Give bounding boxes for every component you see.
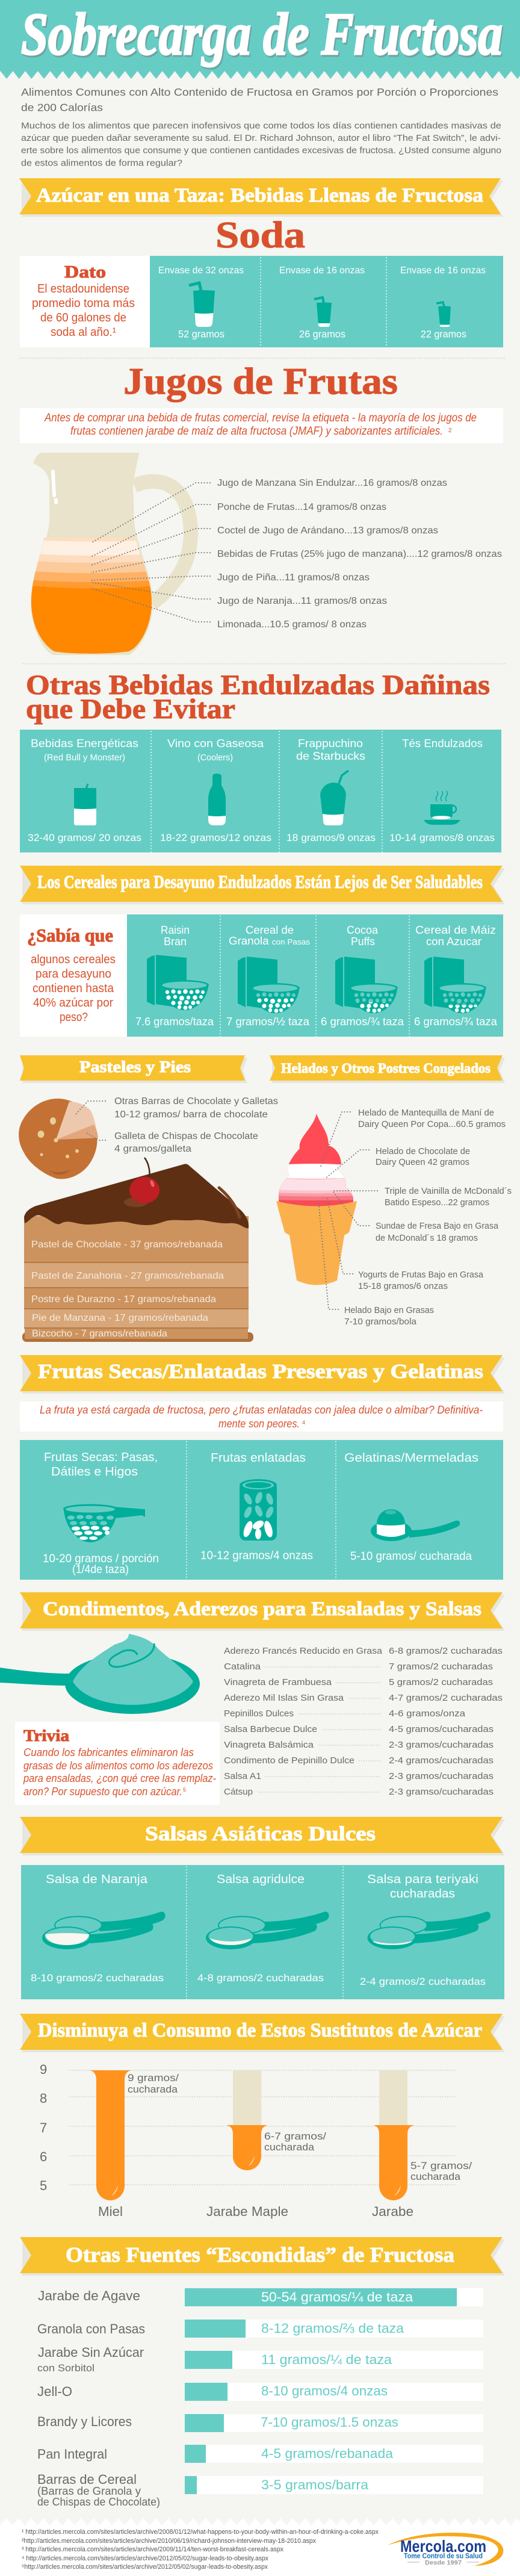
canned fruit: [200, 1451, 313, 1562]
did you know: [27, 925, 116, 1024]
bar chart: hidden sources: [37, 2288, 483, 2508]
chart: cake layers: Pastel de Chocolate - 37 gramos/rebanada: [31, 1240, 223, 1250]
intro heading: [21, 86, 498, 113]
ice cream labels: Helado Bajo en Grasas: [344, 1306, 434, 1315]
sweet and sour: Salsa agridulce: [217, 1873, 305, 1886]
soda 16 oz small: [400, 265, 486, 340]
jell-o: 8-10 gramos/4 onzas: [261, 2383, 388, 2398]
intro paragraph: erte sobre los alimentos que consume y que contienen cantidades excesivas de fructosa. ¿Usted consume alguno: [21, 146, 501, 155]
logo: mercola: [388, 2533, 503, 2566]
banner: otras fuentes: [20, 2237, 505, 2276]
corn cereal: 6 gramos/¾ taza: [414, 1016, 498, 1028]
granola: Granola con Pasas: [229, 935, 311, 947]
logo: mercola: Tome Control de su Salud: [404, 2553, 483, 2560]
raisin bran: [135, 924, 214, 1028]
heading: soda: Soda: [215, 215, 305, 256]
panel: cereals: [20, 914, 503, 1037]
icon: big spoon with dressing: [0, 1634, 200, 1714]
ice cream labels: Yogurts de Frutas Bajo en Grasa: [358, 1270, 484, 1280]
header band: [0, 0, 520, 79]
intro paragraph: de estos alimentos de forma regular?: [21, 158, 182, 169]
ice cream labels: Batido Espeso...22 gramos: [385, 1198, 489, 1208]
callout: trivia: [15, 1722, 220, 1805]
axis labels: 7: [40, 2120, 47, 2135]
soda 16 oz: 26 gramos: [299, 329, 345, 340]
icon: juice pitcher: [24, 453, 191, 659]
soda 32 oz: 52 gramos: [178, 329, 224, 340]
banner: frutas secas: [20, 1355, 505, 1394]
corn cereal: Cereal de Máiz: [415, 924, 496, 936]
chart: cake layers: Postre de Durazno - 17 gramos/rebanada: [31, 1294, 216, 1305]
banner: cereales: [20, 866, 505, 904]
did you know: peso?: [60, 1011, 88, 1024]
did you know: 40% azúcar por: [33, 996, 113, 1010]
did you know: contienen hasta: [32, 982, 114, 995]
juice list: Bebidas de Frutas (25% jugo de manzana)....12 gramos/8 onzas: [217, 549, 502, 559]
energy drinks: Bebidas Energéticas: [31, 737, 138, 750]
banner: helados: [270, 1055, 505, 1083]
dried fruit: Frutas Secas: Pasas,: [44, 1451, 158, 1464]
banner: otras fuentes: Otras Fuentes “Escondidas” de Fructosa: [66, 2243, 454, 2267]
brandy y licores: Brandy y Licores: [37, 2414, 132, 2429]
panel: soda: [20, 256, 503, 347]
sweet tea: [389, 737, 495, 843]
dried fruit: (1/4de taza): [72, 1563, 129, 1576]
banner: salsas asiáticas: Salsas Asiáticas Dulces: [145, 1823, 376, 1845]
granola: Cereal de: [246, 924, 294, 936]
did you know: algunos cereales: [31, 953, 116, 966]
fact box: El estadounidense: [37, 282, 129, 296]
footnotes: ¹ http://articles.mercola.com/sites/articles/archive/2008/01/12/what-happens-to-your-body-within-an-hour-of-drinking-a-coke.aspx: [22, 2528, 379, 2536]
ice cream labels: [318, 1108, 512, 1327]
ice cream labels: 15-18 gramos/6 onzas: [358, 1282, 448, 1291]
callout: juice label: [20, 408, 503, 443]
table: condiments: 4-6 gramos/onza: [389, 1709, 466, 1719]
jarabe sin azúcar: [37, 2345, 483, 2374]
intro paragraph: azúcar que pueden dañar severamente su salud. El Dr. Richard Johnson, autor el libro “The Fat Switch”, le advi-: [21, 133, 501, 143]
ice cream labels: Helado de Mantequilla de Maní de: [358, 1108, 494, 1118]
bar: jarabe maple: [206, 2070, 326, 2219]
sweet tea: 10-14 gramos/8 onzas: [389, 832, 495, 843]
cookie labels: Galleta de Chispas de Chocolate: [114, 1131, 258, 1141]
barras de cereal: 3-5 gramos/barra: [261, 2477, 369, 2492]
soda 32 oz: [158, 265, 244, 340]
soda 16 oz: Envase de 16 onzas: [279, 265, 365, 276]
granola con pasas: Granola con Pasas: [37, 2321, 145, 2336]
bar: jarabe maple: Jarabe Maple: [206, 2204, 288, 2219]
heading: otras bebidas: Otras Bebidas Endulzadas Dañinas: [26, 669, 490, 701]
barras de cereal: Barras de Cereal: [37, 2472, 137, 2487]
soda 16 oz small: Envase de 16 onzas: [400, 265, 486, 276]
table: condiments: 6-8 gramos/2 cucharadas: [389, 1646, 503, 1656]
wine coolers: Vino con Gaseosa: [167, 737, 264, 750]
callout: trivia: aron? Por supuesto que con azúcar.: [23, 1786, 182, 1798]
banner: azúcar en una taza: [19, 178, 503, 217]
table: condiments: 2-3 gramos/cucharadas: [389, 1740, 494, 1750]
cocoa puffs: 6 gramos/¾ taza: [321, 1016, 404, 1028]
brandy y licores: [37, 2414, 483, 2432]
table: condiments: Vinagreta Balsámica: [224, 1740, 314, 1750]
sweet tea: Tés Endulzados: [402, 737, 483, 750]
orange sauce: Salsa de Naranja: [46, 1873, 148, 1886]
sweet and sour: 4-8 gramos/2 cucharadas: [197, 1972, 324, 1984]
callout: juice label: frutas contienen jarabe de maíz de alta fructosa (JMAF) y saborizantes artificiales.: [70, 425, 443, 438]
canned fruit: 10-12 gramos/4 onzas: [200, 1550, 313, 1562]
juice list: Ponche de Frutas...14 gramos/8 onzas: [217, 502, 386, 512]
logo: mercola: Desde 1997: [425, 2559, 462, 2566]
heading: otras bebidas: que Debe Evitar: [26, 694, 235, 725]
bar: jarabe: 5-7 gramos/: [410, 2160, 472, 2171]
table: condiments: 4-5 gramos/cucharadas: [389, 1724, 494, 1734]
jellies: 5-10 gramos/ cucharada: [350, 1550, 472, 1563]
jarabe de agave: 50-54 gramos/¼ de taza: [261, 2289, 413, 2304]
heading: otras bebidas: [26, 669, 490, 725]
cookie labels: 10-12 gramos/ barra de chocolate: [114, 1110, 268, 1120]
jellies: Gelatinas/Mermeladas: [344, 1451, 478, 1465]
granola: 7 gramos/½ taza: [226, 1016, 310, 1028]
granola con pasas: [37, 2320, 483, 2338]
intro paragraph: Muchos de los alimentos que parecen inofensivos que come todos los días contienen cantidades masivas de: [21, 120, 501, 131]
bar: jarabe maple: 6-7 gramos/: [264, 2131, 326, 2142]
chocolate icing: [24, 1164, 249, 1228]
raisin bran: 7.6 gramos/taza: [135, 1016, 214, 1028]
banner: pasteles y pies: Pasteles y Pies: [79, 1058, 191, 1076]
energy drinks: [28, 737, 141, 843]
bar: miel: 9 gramos/: [128, 2072, 179, 2084]
table: condiments: Cátsup: [224, 1787, 253, 1797]
jarabe sin azúcar: con Sorbitol: [37, 2362, 94, 2374]
sweet and sour: [197, 1873, 329, 1984]
callout: trivia: Cuando los fabricantes eliminaron las: [23, 1746, 194, 1758]
banner: condimentos: Condimentos, Aderezos para Ensaladas y Salsas: [43, 1598, 481, 1620]
banner: disminuya: Disminuya el Consumo de Estos Sustitutos de Azúcar: [38, 2020, 482, 2041]
callout: trivia: Trivia: [23, 1727, 70, 1745]
table: condiments: Condimento de Pepinillo Dulce: [224, 1755, 354, 1766]
cocoa puffs: Cocoa: [347, 924, 379, 936]
frappuccino: [286, 737, 376, 843]
fact box: [32, 262, 135, 339]
dried fruit: Dátiles e Higos: [51, 1465, 138, 1479]
banner: salsas asiáticas: [20, 1817, 505, 1855]
footnotes: ⁴ http://articles.mercola.com/sites/articles/archive/2012/05/02/sugar-leads-to-obesity.aspx: [22, 2555, 268, 2562]
orange sauce: 8-10 gramos/2 cucharadas: [31, 1972, 164, 1984]
jell-o: [37, 2383, 483, 2401]
bar: miel: Miel: [98, 2204, 123, 2219]
callout: fruit note: [20, 1401, 503, 1432]
pan integral: [37, 2445, 483, 2463]
bar: jarabe: cucharada: [410, 2171, 461, 2182]
brandy y licores: 7-10 gramos/1.5 onzas: [261, 2415, 398, 2430]
ice cream labels: Dairy Queen 42 gramos: [376, 1158, 469, 1167]
callout: fruit note: mente son peores.: [218, 1418, 300, 1430]
chart: cake layers: Pie de Manzana - 17 gramos/rebanada: [32, 1313, 208, 1323]
ice cream labels: Sundae de Fresa Bajo en Grasa: [376, 1221, 499, 1231]
did you know: ¿Sabía que: [27, 925, 113, 946]
axis labels: 8: [40, 2091, 47, 2106]
icon: cherry: [124, 1158, 159, 1207]
teriyaki: 2-4 gramos/2 cucharadas: [360, 1976, 486, 1987]
fact box: promedio toma más: [32, 297, 135, 310]
table: condiments: 7 gramos/2 cucharadas: [389, 1662, 493, 1672]
jarabe sin azúcar: 11 gramos/¼ de taza: [261, 2352, 392, 2367]
fact box: de 60 galones de: [40, 311, 126, 324]
table: condiments: 2-3 gramos/cucharadas: [389, 1771, 494, 1781]
jell-o: Jell-O: [37, 2384, 72, 2399]
table: condiments: 2-4 gramos/cucharadas: [389, 1755, 494, 1766]
juice list: [91, 478, 502, 630]
pan integral: Pan Integral: [37, 2447, 107, 2462]
cookie labels: 4 gramos/galleta: [114, 1144, 191, 1154]
juice list: Jugo de Naranja...11 gramos/8 onzas: [217, 596, 387, 606]
soda 16 oz small: 22 gramos: [421, 329, 466, 340]
jellies: [344, 1451, 478, 1563]
table: condiments: Salsa A1: [224, 1771, 261, 1781]
ice cream labels: 7-10 gramos/bola: [344, 1317, 417, 1327]
corn cereal: con Azucar: [426, 936, 481, 948]
cocoa puffs: Puffs: [351, 936, 375, 948]
juice list: Jugo de Manzana Sin Endulzar...16 gramos/8 onzas: [217, 478, 447, 488]
energy drinks: 32-40 gramos/ 20 onzas: [28, 832, 141, 843]
teriyaki: cucharadas: [390, 1887, 455, 1901]
callout: trivia: grasas de los alimentos como los aderezos: [23, 1760, 213, 1772]
panel: asian sauces: [21, 1865, 504, 1999]
footnotes: ⁵http://articles.mercola.com/sites/articles/archive/2012/05/02/sugar-leads-to-obesity.aspx: [22, 2563, 268, 2571]
heading: jugos de frutas: Jugos de Frutas: [123, 361, 398, 402]
chart: sugar substitutes: [40, 2062, 472, 2219]
callout: fruit note: La fruta ya está cargada de fructosa, pero ¿frutas enlatadas con jalea dulce o almíbar? Definitiva-: [40, 1404, 483, 1416]
fact box: Dato: [64, 262, 106, 282]
orange sauce: [31, 1873, 166, 1984]
soda 16 oz: [279, 265, 365, 340]
barras de cereal: de Chispas de Chocolate): [37, 2496, 160, 2508]
axis labels: 9: [40, 2062, 47, 2077]
barras de cereal: [37, 2472, 483, 2508]
intro heading: de 200 Calorías: [21, 101, 103, 113]
callout: trivia: para ensaladas, ¿con qué cree las remplaz-: [23, 1772, 216, 1784]
table: condiments: Vinagreta de Frambuesa: [224, 1677, 332, 1687]
juice list: Coctel de Jugo de Arándano...13 gramos/8 onzas: [217, 526, 438, 536]
fact box: soda al año.¹: [51, 326, 116, 339]
energy drinks: (Red Bull y Monster): [44, 753, 125, 763]
table: condiments: Pepinillos Dulces: [224, 1709, 294, 1719]
callout: trivia: 5: [183, 1787, 186, 1793]
table: condiments: [224, 1646, 503, 1797]
juice list: Jugo de Piña...11 gramos/8 onzas: [217, 573, 370, 583]
dried fruit: 10-20 gramos / porción: [43, 1553, 159, 1565]
ice cream labels: Dairy Queen Por Copa...60.5 gramos: [358, 1120, 506, 1129]
canned fruit: Frutas enlatadas: [211, 1451, 306, 1465]
teriyaki: Salsa para teriyaki: [367, 1873, 478, 1886]
dried fruit: [43, 1451, 159, 1576]
logo: mercola: Mercola.com: [400, 2537, 486, 2556]
table: condiments: Aderezo Francés Reducido en Grasa: [224, 1646, 383, 1656]
teriyaki: [360, 1873, 491, 1987]
ice cream labels: Triple de Vainilla de McDonald´s: [385, 1187, 512, 1196]
footnotes: [22, 2528, 379, 2571]
did you know: para desayuno: [36, 967, 111, 981]
banner: azúcar en una taza: Azúcar en una Taza: Bebidas Llenas de Fructosa: [36, 185, 483, 206]
frappuccino: de Starbucks: [296, 750, 365, 762]
cocoa puffs: [321, 924, 404, 1028]
frappuccino: 18 gramos/9 onzas: [286, 832, 376, 843]
granola: [226, 924, 311, 1028]
axis labels: 6: [40, 2149, 47, 2164]
table: condiments: Aderezo Mil Islas Sin Grasa: [224, 1693, 344, 1703]
callout: juice label: Antes de comprar una bebida de frutas comercial, revise la etiqueta - la mayoría de los jugos de: [44, 412, 477, 424]
banner: pasteles y pies: [20, 1055, 247, 1083]
bar: miel: cucharada: [128, 2084, 178, 2095]
bar: jarabe: Jarabe: [372, 2204, 413, 2219]
bar: miel: [90, 2070, 179, 2219]
chart: cake layers: [22, 1158, 253, 1342]
jarabe sin azúcar: Jarabe Sin Azúcar: [38, 2345, 144, 2360]
banner: frutas secas: Frutas Secas/Enlatadas Preservas y Gelatinas: [38, 1361, 483, 1383]
pan integral: 4-5 gramos/rebanada: [261, 2446, 394, 2461]
footnotes: ²http://articles.mercola.com/sites/articles/archive/2010/06/19/richard-johnson-interview-may-18-2010.aspx: [22, 2537, 316, 2545]
intro heading: Alimentos Comunes con Alto Contenido de Fructosa en Gramos por Porción o Proporciones: [21, 86, 498, 98]
panel: fruits and jellies: [20, 1440, 503, 1580]
bar: jarabe: [372, 2070, 472, 2219]
table: condiments: Salsa Barbecue Dulce: [224, 1724, 317, 1734]
jarabe de agave: Jarabe de Agave: [38, 2288, 140, 2303]
footnotes: ³ http://articles.mercola.com/sites/articles/archive/2009/11/14/ten-worst-breakfast-cereals.aspx: [22, 2546, 283, 2553]
chart: cake layers: Bizcocho - 7 gramos/rebanada: [32, 1329, 167, 1339]
granola con pasas: 8-12 gramos/⅔ de taza: [261, 2321, 404, 2336]
banner: condimentos: [20, 1592, 505, 1631]
table: condiments: 4-7 gramos/2 cucharadas: [389, 1693, 503, 1703]
wine coolers: (Coolers): [197, 753, 233, 763]
raisin bran: Raisin: [161, 924, 190, 936]
jarabe de agave: [38, 2288, 483, 2306]
footer background: [0, 2518, 520, 2576]
ice cream labels: de McDonald´s 18 gramos: [376, 1234, 478, 1243]
banner: helados: Helados y Otros Postres Congelados: [281, 1061, 491, 1076]
icon: cookie: [19, 1099, 98, 1179]
icon: ice cream cone: [274, 1114, 358, 1285]
ice cream labels: Helado de Chocolate de: [376, 1147, 470, 1156]
frappuccino: Frappuchino: [298, 737, 363, 750]
table: condiments: 5 gramos/2 cucharadas: [389, 1677, 493, 1687]
corn cereal: [414, 924, 498, 1028]
intro paragraph: [21, 120, 501, 169]
soda 32 oz: Envase de 32 onzas: [158, 265, 244, 276]
barras de cereal: (Barras de Granola y: [37, 2485, 141, 2497]
table: condiments: 2-3 gramso/cucharadas: [389, 1787, 494, 1797]
wine coolers: 18-22 gramos/12 onzas: [160, 832, 271, 843]
callout: juice label: 2: [448, 427, 452, 434]
bar: jarabe maple: cucharada: [264, 2141, 315, 2153]
axis labels: 5: [40, 2178, 47, 2193]
axis labels: [40, 2062, 47, 2193]
wine coolers: [160, 737, 271, 843]
cookie labels: [75, 1096, 278, 1154]
table: condiments: Catalina: [224, 1662, 261, 1672]
panel: other drinks: [20, 730, 501, 852]
banner: disminuya: [20, 2014, 505, 2052]
callout: fruit note: 4: [302, 1420, 305, 1426]
raisin bran: Bran: [164, 936, 187, 948]
juice list: Limonada...10.5 gramos/ 8 onzas: [217, 619, 367, 630]
chart: cake layers: Pastel de Zanahoria - 27 gramos/rebanada: [31, 1271, 224, 1281]
cookie labels: Otras Barras de Chocolate y Galletas: [114, 1096, 278, 1106]
